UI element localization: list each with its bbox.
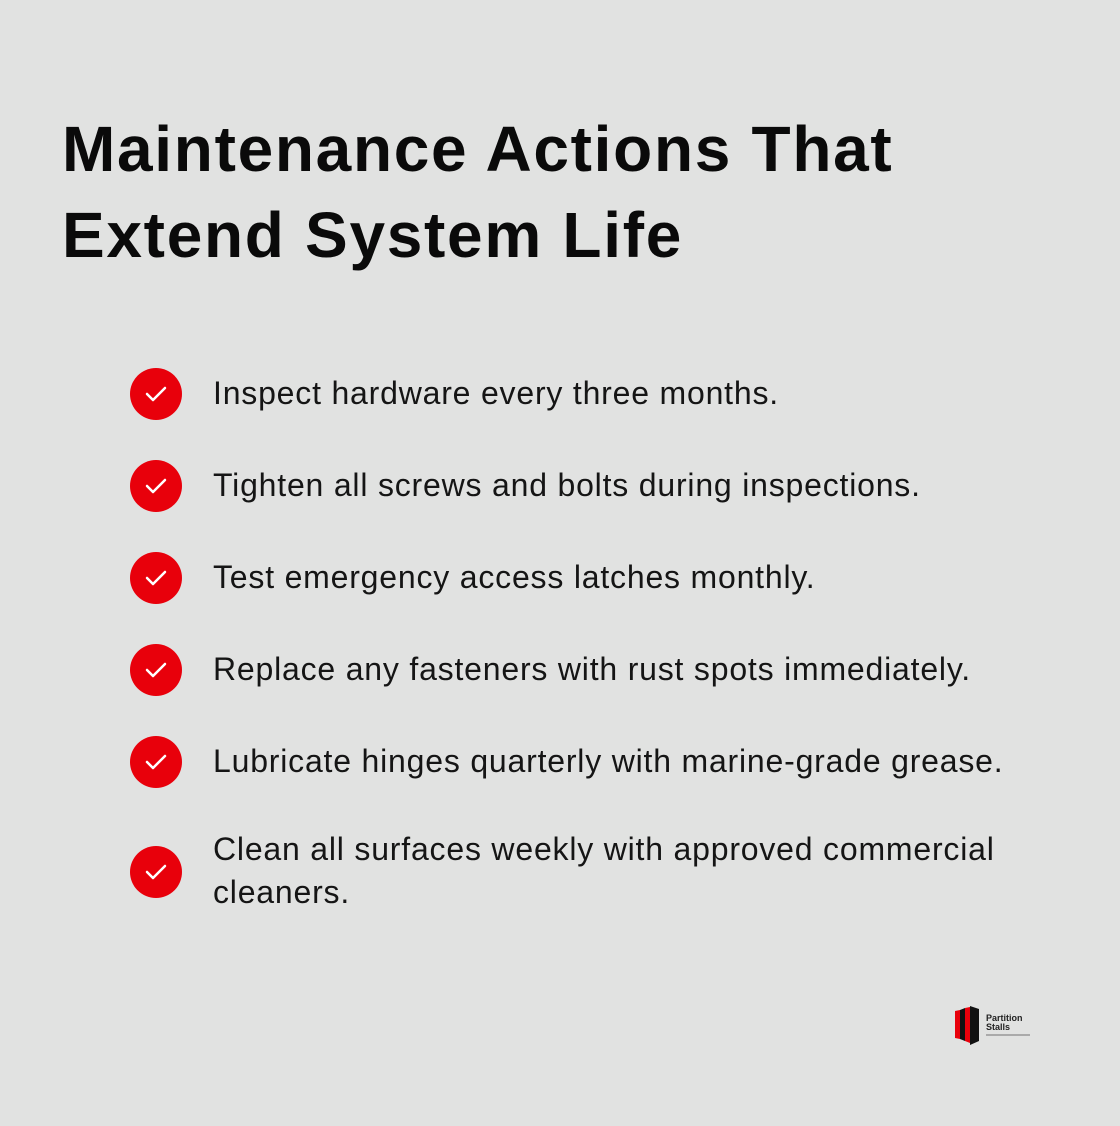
icon: check	[130, 552, 182, 604]
logo	[955, 1006, 1030, 1045]
item 6	[130, 831, 995, 910]
item 5: Lubricate hinges quarterly with marine-grade grease.	[213, 743, 1003, 779]
title	[62, 113, 893, 271]
item 4: Replace any fasteners with rust spots immediately.	[213, 651, 971, 687]
item 6: Clean all surfaces weekly with approved commercial	[213, 831, 995, 867]
logo: Partition	[986, 1013, 1023, 1023]
title: Extend System Life	[62, 199, 683, 271]
item 5	[130, 736, 1003, 788]
logo: Stalls	[986, 1022, 1010, 1032]
item 3	[130, 552, 816, 604]
item 2: Tighten all screws and bolts during inspections.	[213, 467, 921, 503]
item 2	[130, 460, 921, 512]
icon: check	[130, 368, 182, 420]
icon: check	[130, 644, 182, 696]
title: Maintenance Actions That	[62, 113, 893, 185]
item 4	[130, 644, 971, 696]
icon: check	[130, 736, 182, 788]
icon: check	[130, 846, 182, 898]
icon: check	[130, 460, 182, 512]
item 3: Test emergency access latches monthly.	[213, 559, 816, 595]
item 6: cleaners.	[213, 874, 350, 910]
item 1	[130, 368, 779, 420]
item 1: Inspect hardware every three months.	[213, 375, 779, 411]
